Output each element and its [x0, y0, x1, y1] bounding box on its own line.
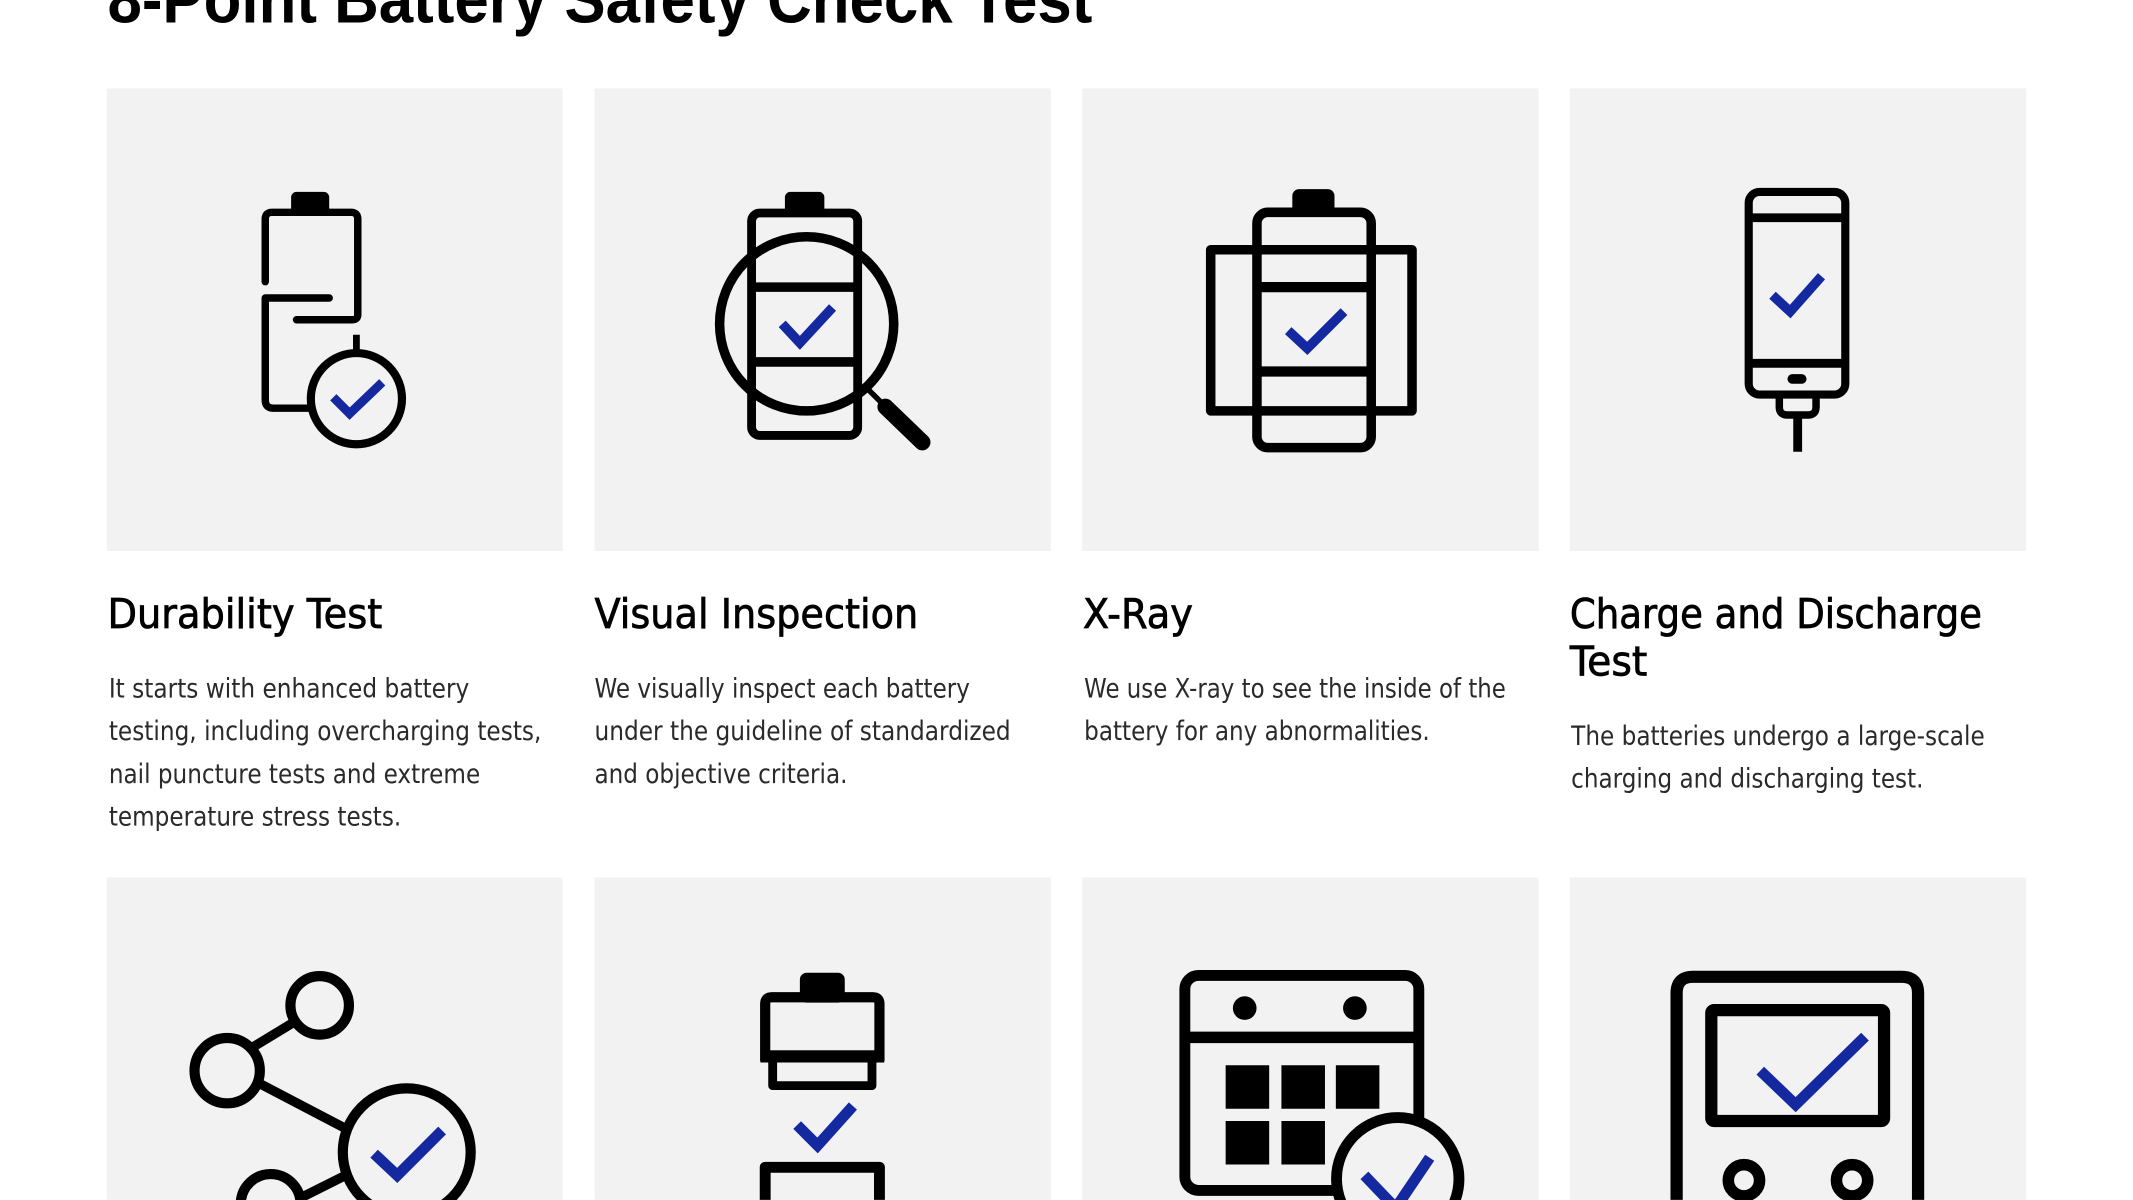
description: The batteries undergo a large-scale [1570, 721, 1985, 752]
card background [1082, 878, 1539, 1200]
card background [1570, 878, 2026, 1200]
heading: X-Ray [1083, 590, 1193, 638]
description [109, 673, 541, 833]
description: charging and discharging test. [1571, 764, 1924, 795]
card background [107, 878, 562, 1200]
icon: separated battery with check [760, 973, 884, 1200]
heading: Durability Test [107, 590, 382, 638]
description: battery for any abnormalities. [1084, 716, 1430, 747]
panel: cell assembly check (lower row) [594, 878, 1051, 1200]
description [1570, 721, 1985, 795]
description: We visually inspect each battery [594, 673, 970, 704]
icon: connected nodes with check [195, 976, 471, 1200]
icon: test device with check screen [1677, 977, 1918, 1200]
heading: Test [1569, 637, 1647, 685]
panel: tester device check (lower row) [1570, 878, 2026, 1200]
panel: Durability Test [107, 89, 562, 833]
heading: Visual Inspection [594, 590, 918, 638]
icon: phone on charger [1749, 192, 1846, 452]
description [1084, 673, 1506, 747]
icon: battery under x-ray frame [1211, 189, 1412, 448]
card background [594, 878, 1051, 1200]
panel: X-Ray [1082, 89, 1539, 747]
card background [1082, 89, 1539, 551]
card background [1570, 89, 2026, 551]
card background [107, 89, 562, 551]
panel: network check (lower row) [107, 878, 562, 1200]
heading: Charge and Discharge [1570, 590, 1982, 638]
icon: battery under magnifying glass [720, 192, 922, 442]
description: temperature stress tests. [109, 802, 401, 833]
description [594, 673, 1011, 790]
icon: battery with check badge [265, 192, 402, 444]
description: and objective criteria. [594, 759, 847, 790]
icon: calendar with check badge [1185, 975, 1459, 1200]
panel: calendar check (lower row) [1082, 878, 1539, 1200]
description: nail puncture tests and extreme [109, 759, 480, 790]
description: under the guideline of standardized [594, 716, 1011, 747]
description: It starts with enhanced battery [109, 673, 469, 704]
card background [594, 89, 1051, 551]
heading [1569, 590, 1982, 685]
description: We use X-ray to see the inside of the [1084, 673, 1506, 704]
panel: Charge and Discharge Test [1569, 89, 2026, 795]
panel: Visual Inspection [594, 89, 1051, 790]
description: testing, including overcharging tests, [109, 716, 541, 747]
